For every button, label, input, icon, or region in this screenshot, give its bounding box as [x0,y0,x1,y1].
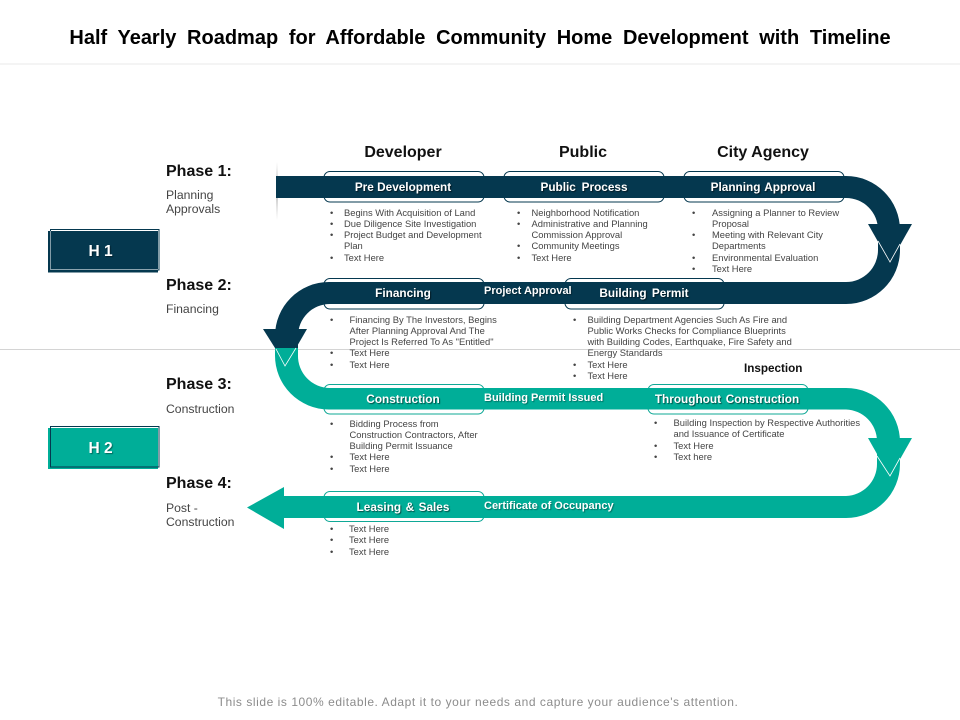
band label: Building Permit Issued: Building Permit Issued [484,392,603,404]
H1 box [48,230,159,272]
phase 3 heading: Phase 3: [166,376,232,393]
phase 4 text: Post - [166,500,198,514]
phase 2 heading: Phase 2: [166,277,232,294]
footer note: This slide is 100% editable. Adapt it to your needs and capture your audience's attention. [218,695,738,709]
band label: Construction: Construction [366,392,440,406]
phase 1 text: Approvals [166,202,220,216]
band label: Leasing & Sales: Leasing & Sales [357,500,449,514]
band label: Inspection: Inspection [744,362,802,375]
phase 1 heading: Phase 1: [166,163,232,180]
text block: planning approval: Departments [712,241,766,251]
text block: financing: Text Here [350,360,390,370]
band label: Pre Development: Pre Development [355,180,451,194]
text block: planning approval: Assigning a Planner to Review [712,208,839,218]
phase 4 text [166,500,234,528]
text block: planning approval: Proposal [712,219,749,229]
text block: construction: Bidding Process from [350,418,439,428]
column heading: City Agency: City Agency [717,144,809,161]
phase 4 heading: Phase 4: [166,475,232,492]
band label: Public Process: Public Process [540,180,628,194]
text block: building permit: Text Here [588,360,628,370]
text block: construction: Construction Contractors, After [350,430,478,440]
text block: public process: Text Here [532,252,572,262]
pill outlines: teal rows [324,384,808,522]
H2 box [48,426,159,469]
text block: pre development: Plan [344,241,363,251]
text block: building permit: Text Here [588,371,628,381]
band label: Planning Approval: Planning Approval [711,180,815,194]
text block: public process: Community Meetings [532,241,620,251]
dark roadmap path with arrows [263,176,912,348]
text block: financing: Text Here [350,348,390,358]
text block: planning approval: Environmental Evaluation [712,252,818,262]
text block: building permit: Building Department Agencies Such As Fire and [588,314,787,324]
phase 1 text: Planning [166,188,213,202]
text block: planning approval: Text Here [712,264,752,274]
phase 3 text: Construction [166,402,234,416]
text block: pre development [330,208,482,262]
text block: building permit [573,314,792,381]
text block: leasing and sales: Text Here [349,546,389,556]
band label: Building Permit: Building Permit [599,286,689,300]
pill outlines: dark row 1 [324,172,844,309]
text block: pre development: Text Here [344,252,384,262]
text block: construction: Building Permit Issuance [350,441,453,451]
phase 4 text: Construction [166,514,234,528]
text block: public process: Commission Approval [532,230,622,240]
column heading: Public: Public [559,144,607,161]
text block: financing: After Planning Approval And The [350,326,485,336]
text block: building permit: with Building Codes, Earthquake, Fire Safety and [588,337,792,347]
text block: throughout construction: Text here [674,452,712,462]
text block: pre development: Project Budget and Development [344,230,482,240]
text block: construction [330,418,478,474]
text block: building permit: Energy Standards [588,348,663,358]
band label: Financing: Financing [375,286,431,300]
teal roadmap path with arrows [247,348,912,529]
text block: leasing and sales: Text Here [349,524,389,534]
text block: pre development: Due Diligence Site Investigation [344,219,476,229]
text block: leasing and sales [330,524,389,556]
text block: public process [517,208,648,262]
text block: public process: Administrative and Planning [532,219,648,229]
text block: public process: Neighborhood Notification [532,208,639,218]
text block: financing: Project Is Referred To As "Entitled" [350,337,494,347]
column heading: Developer: Developer [364,144,442,161]
text block: throughout construction: Text Here [674,440,714,450]
band label: Project Approval: Project Approval [484,285,572,297]
phase 1 text [166,188,220,216]
H2 label: H 2 [88,440,113,457]
band label: Certificate of Occupancy: Certificate of Occupancy [484,500,614,512]
text block: throughout construction [654,418,860,462]
text block: planning approval: Meeting with Relevant City [712,230,823,240]
title: Half Yearly Roadmap for Affordable Community Home Development with Timeline [69,27,891,49]
text block: leasing and sales: Text Here [349,535,389,545]
text block: financing: Financing By The Investors, Begins [350,314,497,324]
band label: Throughout Construction: Throughout Construction [655,392,799,406]
text block: planning approval [692,208,840,274]
phase 2 text: Financing [166,302,219,316]
text block: pre development: Begins With Acquisition of Land [344,208,475,218]
text block: throughout construction: Building Inspection by Respective Authorities [674,418,860,428]
text block: construction: Text Here [350,464,390,474]
H1 label: H 1 [88,243,113,260]
text block: financing [330,314,497,370]
text block: building permit: Public Works Checks for Compliance Blueprints [588,326,786,336]
text block: construction: Text Here [350,452,390,462]
text block: throughout construction: and Issuance of Certificate [674,429,784,439]
